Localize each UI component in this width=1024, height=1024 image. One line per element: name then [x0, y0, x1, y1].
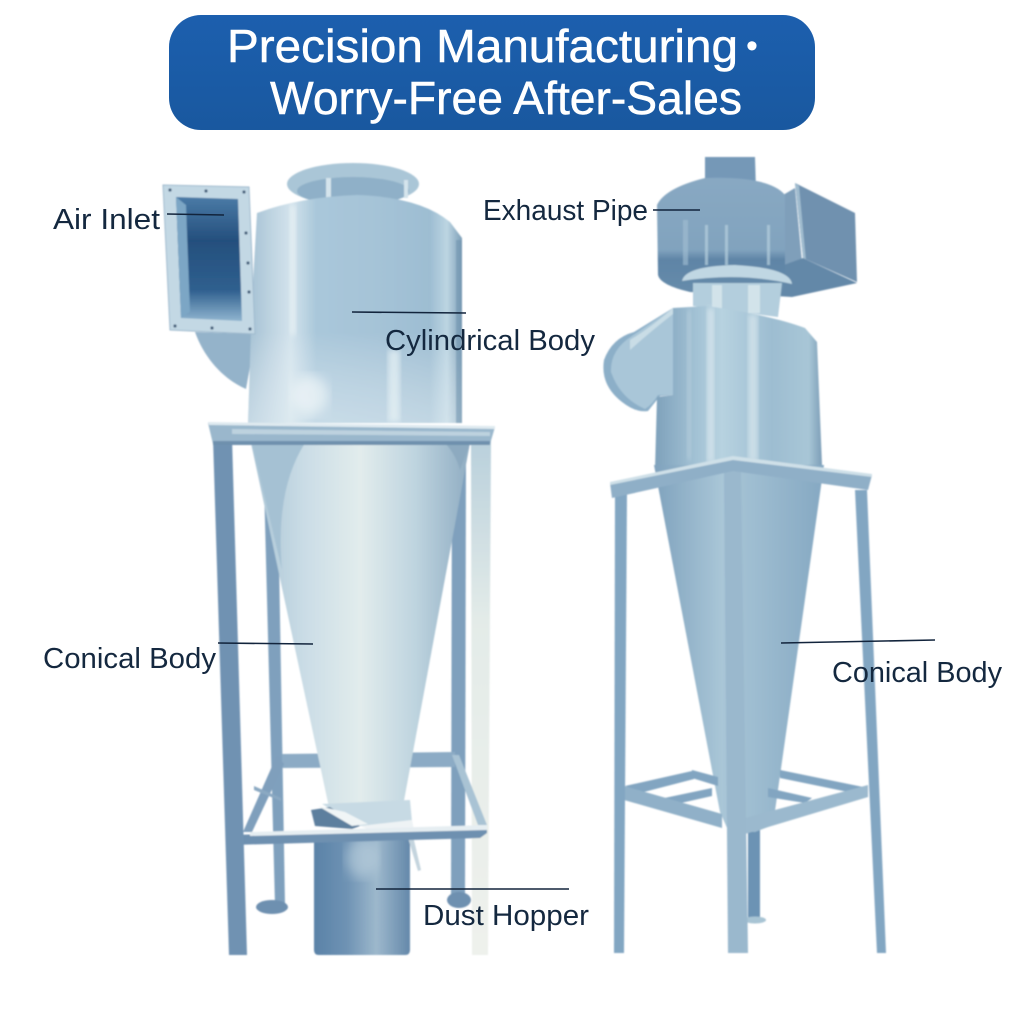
label: dust hopper: Dust Hopper [423, 900, 589, 932]
front right leg [471, 440, 491, 955]
conical body [654, 465, 824, 832]
right cyclone machine [603, 157, 886, 953]
lower frame side bars [243, 755, 487, 832]
label: right conical body: Conical Body [832, 657, 1002, 689]
hopper collar [311, 800, 421, 871]
title banner: Precision Manufacturing [227, 20, 738, 72]
title banner: • [746, 27, 758, 65]
inlet scroll [195, 332, 256, 389]
base feet [256, 892, 471, 914]
rear lower frame [282, 752, 455, 768]
rear foot [744, 916, 766, 924]
label: right conical body [781, 640, 1002, 689]
label: air inlet: Air Inlet [53, 204, 160, 236]
front leg [724, 470, 748, 953]
left cyclone machine [163, 163, 495, 955]
label: cylindrical body: Cylindrical Body [385, 325, 595, 357]
cylindrical body [655, 306, 822, 470]
left leg [614, 490, 627, 953]
lower frame [624, 770, 868, 834]
title banner [169, 15, 815, 130]
top frame plate [208, 422, 495, 445]
inlet flange [163, 185, 255, 334]
top flange [287, 163, 419, 205]
fan housing [657, 178, 785, 298]
conical body [251, 443, 470, 812]
rear legs [263, 445, 466, 905]
right leg [855, 490, 886, 953]
outlet duct [770, 183, 857, 297]
neck flange [682, 265, 792, 317]
dust hopper [314, 834, 410, 955]
rear leg [748, 825, 760, 920]
inlet pipe [603, 308, 673, 411]
front left leg [213, 438, 247, 955]
cylindrical body [248, 195, 462, 423]
top stub pipe [705, 157, 756, 190]
title banner: Worry-Free After-Sales [270, 72, 742, 124]
label: exhaust pipe: Exhaust Pipe [483, 195, 648, 227]
front lower frame bar [232, 827, 487, 845]
label: left conical body: Conical Body [43, 643, 217, 675]
top frame plate [610, 456, 872, 498]
